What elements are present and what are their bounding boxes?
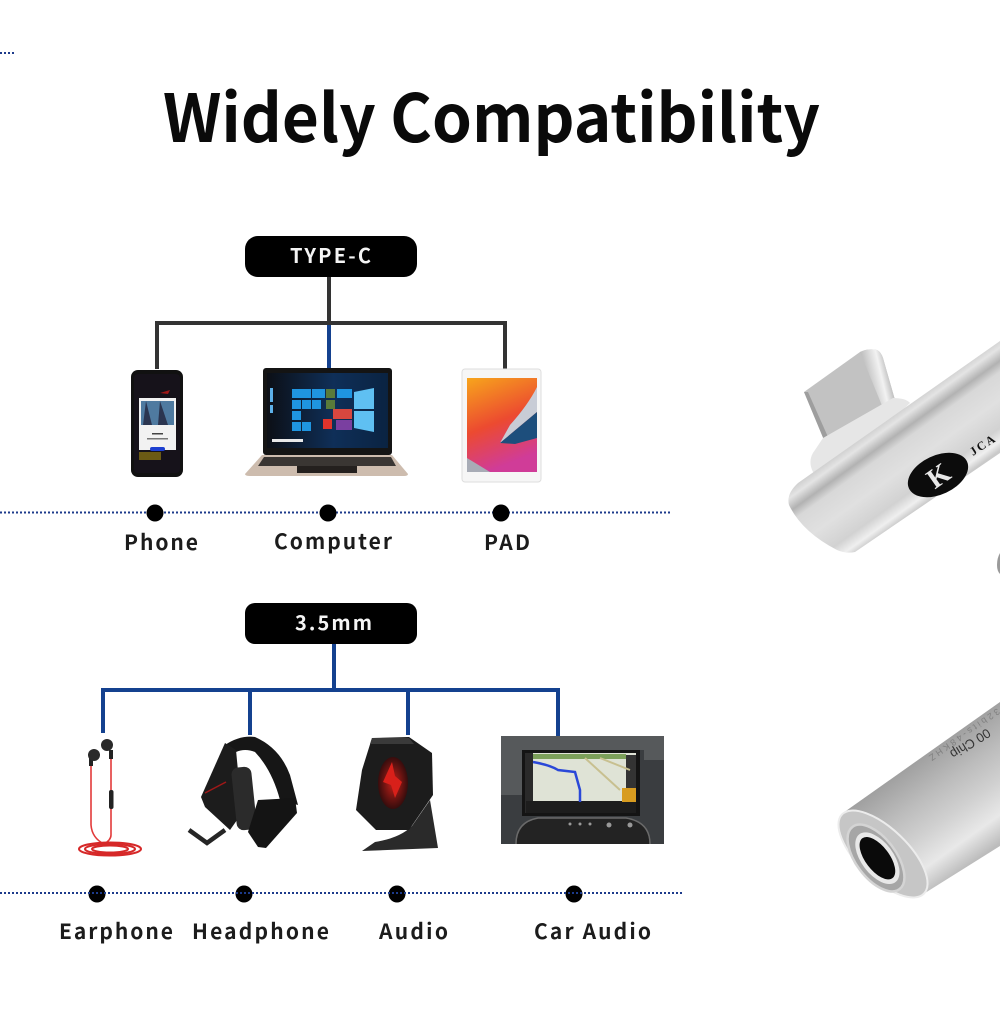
USB-C plug — [804, 349, 895, 440]
adapter body — [788, 341, 1000, 553]
panel: TYPE-C tree — [0, 236, 672, 557]
label: Earphone: Earphone — [59, 916, 173, 946]
connector lines: 3.5mm — [103, 644, 558, 736]
icon: car audio — [501, 736, 664, 844]
product: 3.5mm adapter jack end — [825, 702, 1000, 912]
icon: headphone — [189, 737, 298, 848]
heading pill: 3.5mm: 3.5mm — [295, 607, 372, 636]
engraved text: 32bits-48KHZ — [927, 706, 1000, 763]
icon: laptop — [245, 368, 408, 476]
label: Car Audio: Car Audio — [534, 916, 651, 946]
engraved text: 00 Chip — [947, 725, 993, 762]
collar — [810, 398, 910, 480]
product: Type-C adapter plug end — [788, 341, 1000, 553]
label: PAD: PAD — [484, 527, 530, 557]
jack face — [825, 796, 941, 912]
icon: phone — [131, 370, 183, 477]
label: Computer: Computer — [274, 526, 393, 556]
barrel — [843, 702, 1000, 893]
heading pill: TYPE-C: TYPE-C — [290, 240, 371, 269]
logo badge: K — [921, 457, 957, 495]
top-left dotted mark — [0, 52, 15, 54]
small part at right edge — [997, 553, 1000, 574]
icon: tablet — [462, 369, 541, 482]
title: Widely Compatibility — [163, 66, 820, 162]
icon: earphones — [79, 739, 141, 856]
brand text: JCA — [967, 431, 999, 459]
heading pill: 3.5mm — [245, 603, 417, 644]
dotted timeline: 3.5mm — [0, 886, 682, 902]
panel: 3.5mm tree — [0, 603, 682, 946]
dotted timeline: TYPE-C — [0, 504, 672, 522]
label: Audio: Audio — [378, 916, 448, 946]
label: Headphone: Headphone — [192, 916, 329, 946]
jack collar — [837, 815, 915, 901]
logo badge — [901, 444, 975, 506]
heading pill: TYPE-C — [245, 236, 417, 277]
connector lines: TYPE-C — [157, 277, 505, 369]
icon: audio speaker — [356, 737, 438, 851]
label: Phone: Phone — [124, 527, 198, 557]
